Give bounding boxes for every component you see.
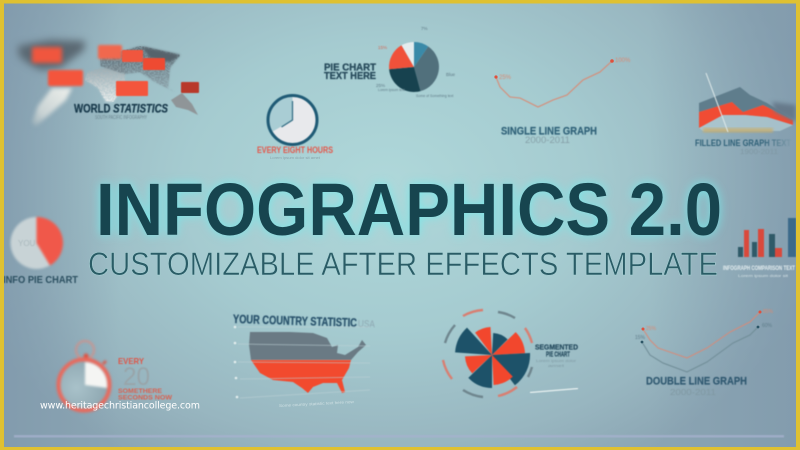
graph title: DOUBLE LINE GRAPH <box>646 376 747 388</box>
seconds label: SECONDS NOW <box>118 394 173 402</box>
filled areas <box>699 87 794 131</box>
white diagonal pointer <box>706 73 728 132</box>
segmented subcaption: amet <box>548 363 566 368</box>
point labels: 25% <box>499 75 512 81</box>
map footnote: Some country statistic text here now <box>279 399 354 408</box>
wedges <box>455 327 530 388</box>
pie labels: 15% <box>378 45 387 50</box>
pie inner text: YOU <box>18 239 36 248</box>
pie chart <box>324 26 456 98</box>
point labels: 100% <box>615 58 631 64</box>
bar subcaption: Lorem ipsum dolor sit <box>738 273 789 278</box>
world statistics title: WORLD STATISTICS <box>74 102 168 116</box>
line <box>496 61 612 107</box>
red callouts <box>32 45 199 96</box>
grey line <box>642 327 758 372</box>
segmented pie chart <box>443 310 579 397</box>
USA red bottom <box>251 360 351 393</box>
pie labels: Lorem ipsum text <box>378 88 405 92</box>
pie caption: INFO PIE CHART <box>3 275 78 286</box>
graph years: 2000-2011 <box>670 388 717 397</box>
outer ring labels <box>443 310 532 397</box>
line labels: 25% <box>646 326 657 332</box>
world map: world statistics <box>18 40 199 126</box>
pie chart title: TEXT HERE <box>324 70 376 82</box>
pie chart title: PIE CHART <box>324 62 377 74</box>
end point <box>610 59 614 63</box>
pie disc <box>10 217 63 269</box>
USA grey top <box>249 332 366 360</box>
watermark: www.heritagechristiancollege.com <box>40 400 200 412</box>
pie labels: 7% <box>421 26 428 31</box>
subtitle: CUSTOMIZABLE AFTER EFFECTS TEMPLATE <box>88 246 718 282</box>
line points <box>641 310 762 343</box>
clock face <box>268 96 317 144</box>
segmented title: PIE CHART <box>546 350 570 358</box>
graph title: SINGLE LINE GRAPH <box>501 126 597 138</box>
clock subcaption: Lorem ipsum dolor sit amet <box>270 156 320 160</box>
clock icon: every eight hours <box>257 96 333 160</box>
bars <box>738 218 796 257</box>
single line graph <box>494 58 631 145</box>
every label: EVERY <box>118 356 144 366</box>
world statistics subtitle: SOUTH PACIFIC INFOGRAPHY <box>95 115 147 121</box>
segmented subcaption: Lorem ipsum dolor <box>536 358 577 363</box>
map title: YOUR COUNTRY STATISTIC <box>233 312 357 330</box>
filled line graph <box>695 73 796 156</box>
graph years: 1900-2011 <box>740 149 778 156</box>
double line graph <box>635 309 774 397</box>
pie labels: Blue <box>446 72 456 77</box>
point labels <box>499 58 631 81</box>
stopwatch: every 20 seconds <box>58 341 173 410</box>
white pointer <box>491 310 493 347</box>
left pie chart <box>3 217 78 286</box>
seconds label: SOMETHERE <box>118 388 163 395</box>
comparison bar chart <box>723 218 796 278</box>
white underline <box>530 388 578 392</box>
line labels: 15% <box>635 335 646 341</box>
scale dots <box>234 326 238 398</box>
pie labels: Some of Something text <box>416 94 453 98</box>
pie labels <box>376 26 456 98</box>
main title: INFOGRAPHICS 2.0 <box>96 168 722 251</box>
stopwatch icon <box>58 341 110 410</box>
red line <box>643 312 760 358</box>
pie slices <box>389 42 439 92</box>
clock caption: EVERY EIGHT HOURS <box>257 145 333 155</box>
segmented title: SEGMENTED <box>535 342 579 352</box>
blurred right edge <box>772 102 796 122</box>
line labels <box>635 309 774 341</box>
graph years: 2000-2011 <box>525 135 570 145</box>
yellow base band <box>703 128 773 132</box>
pie labels: 25% <box>376 83 385 88</box>
line labels: 60% <box>762 323 773 329</box>
line labels: 85% <box>763 309 774 315</box>
map title: USA <box>358 319 375 330</box>
map continents <box>18 40 198 126</box>
number 20: 20 <box>123 363 150 391</box>
start point <box>494 75 498 79</box>
country statistic map <box>233 312 375 408</box>
scale lines <box>238 327 370 398</box>
